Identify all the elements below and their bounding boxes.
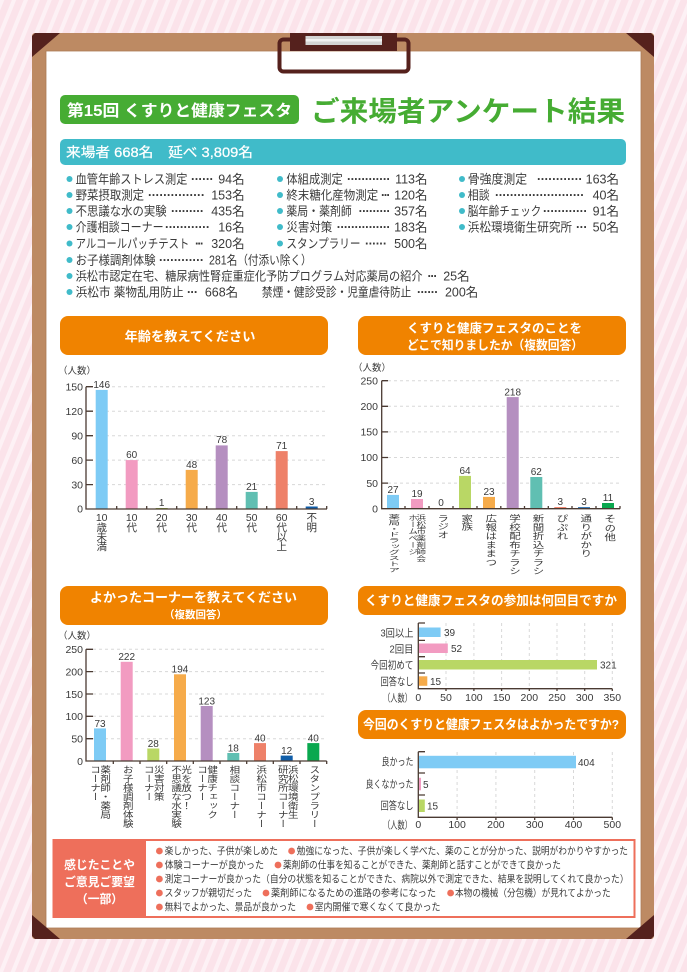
- panel: favourite corners chart: 浜松市コーナー: [254, 765, 267, 828]
- attendance list: 相談: [468, 188, 490, 202]
- attendance list: 113名: [395, 172, 428, 186]
- attendance list: ············: [165, 220, 210, 234]
- panel: age chart: 50: [246, 512, 258, 524]
- attendance list: 終末糖化産物測定: [286, 188, 378, 202]
- panel: age chart: 48: [186, 460, 198, 471]
- comments list: 無料でよかった、景品が良かった: [165, 900, 296, 914]
- panel: number of visits chart: 150: [493, 692, 511, 704]
- panel: age chart: 10: [126, 512, 138, 524]
- panel: number of visits chart: [358, 586, 626, 704]
- attendance list: ···: [428, 270, 438, 284]
- panel: favourite corners chart: 浜松環境衛生: [286, 765, 299, 819]
- panel: favourite corners chart: スタンプラリー: [307, 765, 320, 828]
- heading: satisfaction: 今回のくすりと健康フェスタはよかったですか?: [363, 717, 619, 732]
- attendance list: アルコールパッチテスト: [76, 237, 189, 251]
- panel: age chart: 146: [93, 380, 110, 391]
- attendance list: ···: [195, 237, 204, 251]
- attendance list: ·········: [359, 204, 391, 218]
- panel: how did you learn chart: 100: [360, 452, 378, 464]
- panel: number of visits chart: 300: [576, 692, 594, 704]
- panel: favourite corners chart: 150: [65, 689, 83, 701]
- panel: how did you learn chart: ホームページ: [407, 514, 418, 555]
- panel: how did you learn chart: 広報はままつ: [483, 514, 496, 566]
- panel: number of visits chart: 15: [430, 677, 442, 688]
- attendance list: 体組成測定: [286, 172, 343, 186]
- panel: favourite corners chart: コーナー: [142, 765, 154, 801]
- panel: age chart: 代: [246, 522, 257, 534]
- attendance list: 脳年齢チェック: [468, 204, 541, 218]
- panel: number of visits chart: 0: [415, 692, 421, 704]
- panel: age chart: [58, 316, 328, 553]
- attendance list: 163名: [586, 172, 619, 186]
- attendance list: 94名: [218, 172, 245, 186]
- attendance list: ···: [381, 188, 391, 202]
- heading: favourite corners: よかったコーナーを教えてください: [90, 590, 297, 605]
- panel: favourite corners chart: 40: [254, 734, 266, 744]
- attendance list: 668名: [205, 284, 238, 300]
- panel: satisfaction chart: 良かった: [382, 755, 414, 768]
- panel: favourite corners chart: 200: [65, 666, 83, 678]
- panel: age chart: 不: [306, 512, 317, 524]
- panel: comments: [53, 840, 634, 918]
- panel: how did you learn chart: 通りがかり: [578, 514, 591, 558]
- comments list: 勉強になった、子供が楽しく学べた、薬のことが分かった、説明がわかりやすかった: [297, 844, 628, 858]
- heading: age: 年齢を教えてください: [125, 328, 255, 344]
- heading: favourite corners: （複数回答）: [164, 608, 227, 621]
- panel: number of visits chart: 3回以上: [380, 628, 414, 640]
- panel: favourite corners chart: 73: [94, 719, 106, 730]
- panel: age chart: （人数）: [58, 365, 96, 377]
- panel: how did you learn chart: 0: [372, 504, 378, 516]
- panel: satisfaction chart: （人数）: [383, 818, 412, 832]
- panel: favourite corners chart: 不思議な水実験: [169, 765, 182, 829]
- panel: how did you learn chart: 250: [360, 376, 378, 388]
- comments heading: ご意見ご要望: [64, 875, 135, 889]
- attendance list: 禁煙・健診受診・児童虐待防止: [262, 284, 411, 300]
- comments heading: （一部）: [76, 892, 123, 906]
- panel: number of visits chart: 39: [444, 628, 456, 639]
- panel: favourite corners chart: コーナー: [195, 765, 207, 801]
- panel: age chart: 10: [96, 512, 108, 524]
- panel: how did you learn chart: 新聞折込チラシ: [530, 514, 544, 575]
- panel: number of visits chart: 100: [465, 692, 483, 704]
- heading: age: [60, 316, 328, 355]
- attendance list: ···············: [337, 220, 391, 234]
- heading: how did you learn: どこで知りましたか（複数回答）: [407, 338, 583, 352]
- attendance list: 183名: [394, 220, 428, 234]
- panel: age chart: 未: [96, 532, 107, 544]
- panel: number of visits chart: 2回目: [390, 644, 414, 656]
- attendance list: 357名: [394, 204, 428, 218]
- attendance list: 153名: [211, 188, 245, 202]
- panel: satisfaction chart: 300: [526, 819, 544, 831]
- panel: age chart: 20: [156, 512, 168, 524]
- panel: how did you learn chart: 27: [387, 485, 399, 496]
- panel: satisfaction chart: 404: [578, 758, 595, 769]
- panel: age chart: 60: [276, 512, 288, 524]
- event name badge: 第15回 くすりと健康フェスタ: [67, 101, 292, 120]
- panel: age chart: 代: [156, 522, 167, 534]
- panel: how did you learn chart: （人数）: [353, 362, 391, 374]
- attendance list: 320名: [211, 236, 245, 251]
- attendance list: [66, 172, 619, 300]
- attendance list: ·········: [171, 204, 204, 218]
- comments list: 体験コーナーが良かった: [165, 858, 264, 872]
- panel: how did you learn chart: 浜松市薬剤師会: [416, 513, 426, 563]
- panel: how did you learn chart: 0: [438, 498, 444, 509]
- panel: age chart: 30: [71, 480, 83, 492]
- panel: favourite corners chart: 40: [308, 734, 319, 744]
- panel: satisfaction chart: [358, 710, 626, 832]
- panel: how did you learn chart: 3: [558, 497, 564, 508]
- attendance list: ······: [417, 286, 438, 300]
- attendance list: 浜松市認定在宅、糖尿病性腎症重症化予防プログラム対応薬局の紹介: [76, 268, 423, 284]
- panel: age chart: 代: [276, 522, 287, 534]
- comments list: 薬剤師になるための進路の参考になった: [271, 886, 436, 900]
- comments list: 測定コーナーが良かった（自分の状態を知ることができた、病院以外で測定できた、結果を説明してくれて良かった）: [165, 872, 629, 886]
- panel: age chart: 代: [186, 522, 197, 534]
- attendance list: ············: [347, 172, 391, 186]
- attendance list: 浜松環境衛生研究所: [468, 220, 572, 234]
- panel: age chart: 代: [216, 522, 227, 534]
- title: ご来場者アンケート結果: [311, 95, 625, 127]
- panel: favourite corners chart: 50: [71, 734, 83, 746]
- attendance list: お子様調剤体験: [76, 252, 156, 268]
- panel: how did you learn chart: 3: [581, 497, 587, 508]
- attendance list: ························: [495, 188, 584, 202]
- panel: age chart: 以: [276, 532, 287, 544]
- panel: age chart: 71: [276, 441, 288, 452]
- attendance list: 骨強度測定: [468, 172, 527, 186]
- panel: satisfaction chart: 5: [423, 780, 429, 791]
- panel: satisfaction chart: 200: [487, 819, 505, 831]
- attendance list: 不思議な水の実験: [76, 204, 167, 218]
- attendance list: 435名: [211, 204, 245, 218]
- panel: how did you learn chart: 200: [360, 401, 378, 413]
- comments list: [156, 844, 629, 914]
- panel: favourite corners chart: （人数）: [58, 630, 96, 642]
- panel: how did you learn chart: ぴぷれ: [554, 514, 568, 540]
- attendance list: 血管年齢ストレス測定: [76, 172, 187, 186]
- panel: favourite corners chart: 健康チェック: [205, 765, 218, 819]
- panel: age chart: 60: [71, 455, 83, 467]
- attendance list: 災害対策: [286, 220, 333, 234]
- attendance list: 16名: [218, 220, 245, 234]
- attendance list: 281名（付添い除く）: [209, 252, 312, 268]
- panel: how did you learn chart: 23: [483, 487, 495, 498]
- attendance list: ···: [187, 286, 198, 300]
- panel: satisfaction chart: 400: [565, 819, 582, 831]
- attendance list: 浜松市 薬物乱用防止: [76, 284, 184, 300]
- panel: favourite corners chart: 28: [148, 739, 159, 750]
- panel: age chart: 1: [159, 498, 165, 509]
- panel: number of visits chart: 200: [521, 692, 538, 704]
- panel: number of visits chart: 52: [451, 644, 463, 655]
- panel: age chart: 歳: [96, 522, 107, 534]
- panel: favourite corners chart: 相談コーナー: [227, 764, 240, 819]
- panel: favourite corners chart: 250: [65, 644, 83, 656]
- attendance list: ···············: [148, 188, 205, 202]
- panel: age chart: 満: [96, 541, 107, 553]
- panel: how did you learn chart: 薬局・ドラッグストア: [387, 513, 400, 573]
- comments list: 楽しかった、子供が楽しめた: [165, 844, 278, 858]
- attendance list: ······: [191, 172, 214, 186]
- heading: number of visits: [358, 586, 626, 615]
- panel: age chart: 78: [216, 435, 228, 446]
- panel: age chart: 明: [306, 522, 317, 534]
- heading: how did you learn: くすりと健康フェスタのことを: [407, 320, 582, 336]
- comments list: スタッフが親切だった: [165, 886, 252, 900]
- panel: number of visits chart: 321: [600, 660, 617, 672]
- panel: age chart: 3: [309, 497, 315, 508]
- panel: favourite corners chart: 0: [77, 756, 83, 768]
- event name badge: [60, 95, 299, 124]
- panel: age chart: 60: [126, 450, 138, 461]
- attendance list: 40名: [593, 188, 619, 202]
- attendance list: スタンプラリー: [286, 237, 360, 251]
- panel: age chart: 120: [65, 406, 83, 418]
- attendance list: 50名: [593, 220, 619, 234]
- heading: satisfaction: [358, 710, 626, 739]
- panel: number of visits chart: 250: [548, 692, 566, 704]
- attendance list: 200名: [445, 284, 478, 300]
- panel: favourite corners chart: 薬剤師・薬局: [98, 765, 111, 820]
- panel: satisfaction chart: 15: [427, 802, 439, 812]
- panel: how did you learn chart: 19: [411, 489, 423, 500]
- heading: how did you learn: [358, 316, 626, 355]
- panel: favourite corners chart: 災害対策: [152, 765, 165, 802]
- visitor count bar: 来場者 668名 延べ 3,809名: [66, 145, 253, 160]
- comments heading: 感じたことや: [64, 858, 135, 872]
- panel: how did you learn chart: 家族: [459, 513, 472, 531]
- panel: how did you learn chart: 64: [459, 466, 471, 477]
- panel: how did you learn chart: ラジオ: [435, 514, 447, 539]
- panel: favourite corners chart: お子様調剤体験: [121, 765, 134, 829]
- panel: number of visits chart: （人数）: [383, 692, 412, 704]
- attendance list: ······: [365, 237, 387, 251]
- panel: number of visits chart: 350: [604, 692, 621, 704]
- panel: favourite corners chart: [58, 586, 328, 829]
- panel: favourite corners chart: 123: [198, 696, 215, 708]
- panel: number of visits chart: 50: [440, 692, 452, 704]
- attendance list: 介護相談コーナー: [76, 220, 164, 234]
- panel: age chart: 30: [186, 512, 198, 524]
- panel: how did you learn chart: 218: [504, 388, 521, 398]
- panel: favourite corners chart: 18: [228, 744, 239, 754]
- attendance list: 91名: [593, 204, 619, 218]
- heading: number of visits: くすりと健康フェスタの参加は何回目ですか: [365, 593, 617, 608]
- panel: favourite corners chart: 222: [118, 652, 135, 663]
- panel: age chart: 150: [65, 382, 83, 394]
- panel: satisfaction chart: 良くなかった: [366, 778, 414, 790]
- attendance list: 薬局・薬剤師: [286, 204, 352, 218]
- panel: favourite corners chart: 100: [65, 711, 83, 723]
- panel: age chart: 90: [71, 430, 83, 442]
- panel: age chart: 代: [126, 522, 137, 534]
- panel: age chart: 21: [246, 482, 258, 493]
- panel: number of visits chart: 今回初めて: [370, 658, 414, 672]
- attendance list: ············: [543, 204, 588, 218]
- panel: how did you learn chart: その他: [602, 514, 615, 542]
- panel: satisfaction chart: 0: [415, 819, 421, 831]
- comments list: 本物の機械（分包機）が見れてよかった: [455, 886, 611, 900]
- comments heading: [64, 858, 135, 906]
- panel: favourite corners chart: コーナー: [88, 765, 100, 801]
- panel: how did you learn chart: 50: [366, 478, 378, 490]
- panel: satisfaction chart: 500: [604, 819, 621, 831]
- attendance list: ···: [576, 220, 588, 234]
- panel: how did you learn chart: [353, 316, 626, 575]
- panel: favourite corners chart: 194: [172, 664, 189, 676]
- panel: age chart: 0: [77, 504, 83, 516]
- heading: favourite corners: [60, 586, 328, 625]
- panel: satisfaction chart: 回答なし: [380, 799, 414, 812]
- panel: age chart: 上: [276, 541, 287, 553]
- panel: number of visits chart: 回答なし: [380, 675, 414, 688]
- panel: how did you learn chart: 11: [603, 493, 614, 504]
- panel: how did you learn chart: 学校配布チラシ: [507, 513, 520, 575]
- comments list: 室内開催で寒くなくて良かった: [314, 900, 440, 914]
- attendance list: ············: [537, 172, 583, 186]
- comments list: 薬剤師の仕事を知ることができた、薬剤師と話すことができて良かった: [283, 858, 561, 872]
- panel: favourite corners chart: 光を放つ！: [179, 764, 192, 810]
- attendance list: 500名: [394, 236, 428, 251]
- attendance list: ············: [159, 254, 204, 268]
- panel: favourite corners chart: 12: [281, 746, 293, 757]
- attendance list: 野菜摂取測定: [76, 188, 144, 202]
- panel: favourite corners chart: 研究所コーナー: [276, 765, 289, 828]
- panel: how did you learn chart: 150: [360, 426, 378, 438]
- attendance list: 120名: [394, 188, 428, 202]
- panel: satisfaction chart: 100: [448, 819, 466, 831]
- attendance list: 25名: [443, 268, 470, 284]
- panel: age chart: 40: [216, 512, 228, 524]
- panel: how did you learn chart: 62: [531, 467, 542, 478]
- visitor count bar: [60, 139, 626, 165]
